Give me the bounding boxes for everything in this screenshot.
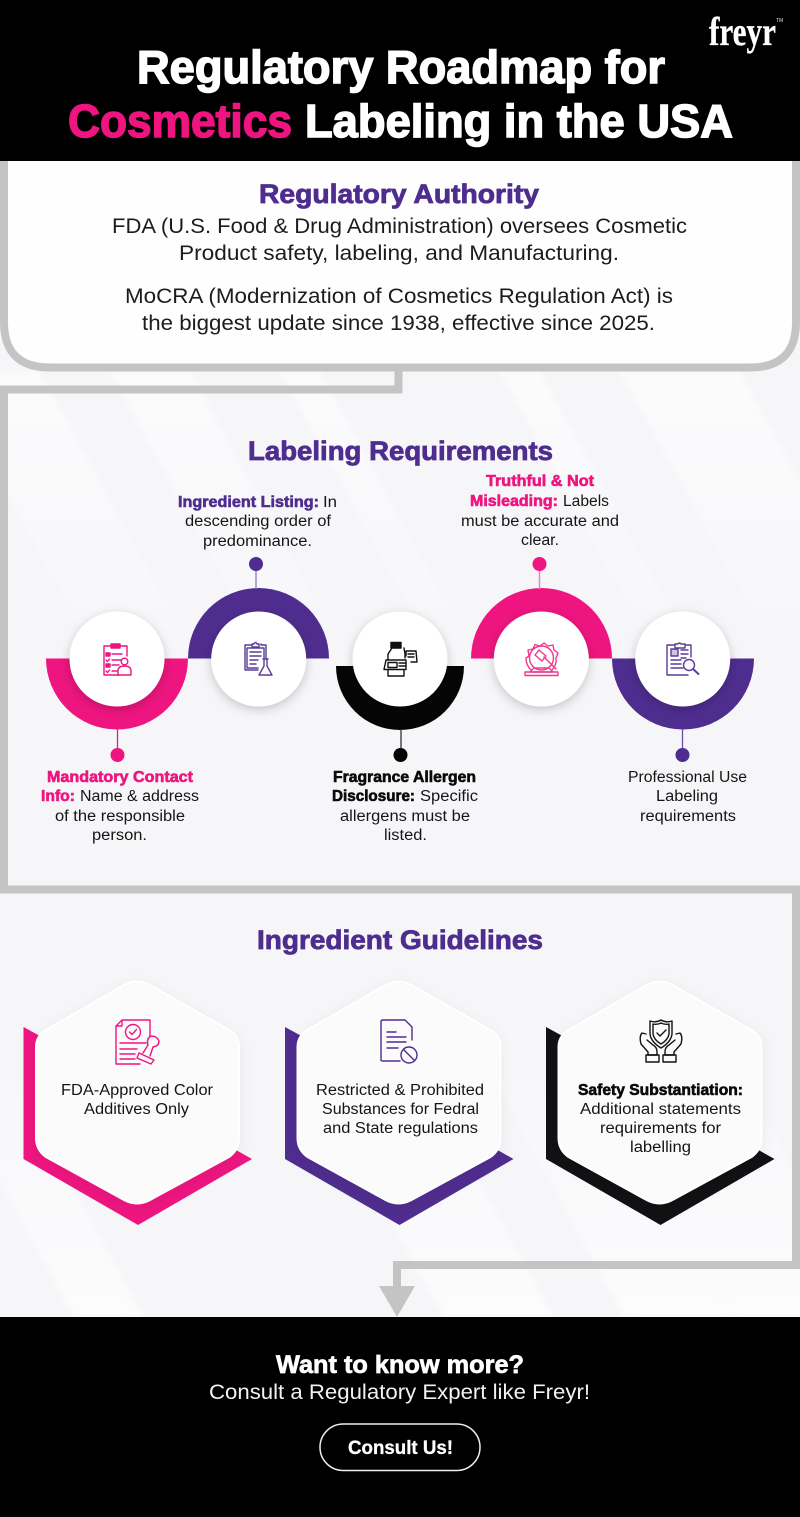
- card: color additives: [24, 982, 252, 1225]
- card: safety substantiation: [546, 982, 774, 1225]
- footer text: Consult a Regulatory Expert like Freyr!: [209, 1381, 590, 1404]
- text: safety substantiation: Additional statements: [580, 1101, 741, 1118]
- label: truthful and not misleading: [461, 473, 619, 549]
- text: safety substantiation: requirements for: [600, 1120, 721, 1137]
- text: MoCRA update: MoCRA (Modernization of Cosmetics Regulation Act) is: [125, 285, 673, 308]
- button: consult us: Consult Us!: [348, 1438, 453, 1459]
- text: restricted substances: Substances for Fedral: [322, 1101, 479, 1118]
- step 4: truthful and not misleading: [461, 473, 619, 706]
- logo: freyr: freyr: [709, 9, 776, 54]
- icon: hands holding shield: [640, 1020, 682, 1062]
- roadmap connector line: [4, 368, 796, 1317]
- title: [68, 41, 733, 147]
- text: restricted substances: [316, 1082, 484, 1137]
- label: truthful and not misleading: must be accurate and: [461, 513, 619, 530]
- text: FDA oversight: FDA (U.S. Food & Drug Administration) oversees Cosmetic: [112, 215, 687, 238]
- step 5: professional use labeling: [612, 612, 754, 825]
- title: Cosmetics: [68, 95, 292, 147]
- label: mandatory contact info: of the responsible: [55, 808, 185, 825]
- icon: gavel in gear: [525, 643, 558, 676]
- label: truthful and not misleading: Truthful & Not: [486, 473, 594, 490]
- heading: labeling requirements: Labeling Requirements: [248, 436, 553, 466]
- label: mandatory contact info: Info:: [41, 788, 75, 805]
- text: color additives: Additives Only: [84, 1101, 189, 1118]
- label: ingredient listing: predominance.: [203, 533, 312, 550]
- label: truthful and not misleading: Labels: [563, 493, 609, 510]
- text: FDA oversight: Product safety, labeling, and Manufacturing.: [179, 242, 619, 265]
- heading: regulatory authority: Regulatory Authority: [259, 179, 539, 209]
- label: fragrance allergen disclosure: Fragrance Allergen: [333, 769, 476, 786]
- step 2: ingredient listing: [178, 494, 337, 706]
- label: ingredient listing: In: [323, 494, 337, 511]
- label: mandatory contact info: person.: [92, 827, 147, 844]
- text: color additives: [61, 1082, 213, 1118]
- footer band: [0, 1317, 800, 1517]
- button: consult us: [320, 1424, 480, 1470]
- label: professional use labeling: [628, 769, 747, 825]
- label: mandatory contact info: [41, 769, 199, 844]
- label: fragrance allergen disclosure: allergens must be: [340, 808, 470, 825]
- logo: freyr: TM: [776, 18, 783, 24]
- label: ingredient listing: descending order of: [185, 513, 332, 530]
- icon: checklist with person: [104, 644, 131, 675]
- text: safety substantiation: Safety Substantiation:: [578, 1082, 743, 1099]
- text: safety substantiation: labelling: [630, 1139, 691, 1156]
- label: ingredient listing: [178, 494, 337, 550]
- text: MoCRA update: the biggest update since 1938, effective since 2025.: [142, 312, 655, 335]
- icon: bottle with labels: [384, 642, 417, 676]
- header band: [0, 0, 800, 161]
- icon: clipboard with flask: [245, 642, 272, 675]
- icon: clipboard with magnifier: [667, 643, 698, 675]
- card: restricted substances: [285, 982, 514, 1225]
- label: fragrance allergen disclosure: Specific: [420, 788, 478, 805]
- title: Labeling in the USA: [305, 95, 733, 147]
- label: truthful and not misleading: Misleading:: [470, 493, 558, 510]
- step 1: mandatory contact info: [41, 612, 199, 844]
- heading: ingredient guidelines: Ingredient Guidelines: [257, 925, 543, 955]
- text: FDA oversight: [112, 215, 687, 265]
- label: mandatory contact info: Name & address: [80, 788, 199, 805]
- label: fragrance allergen disclosure: listed.: [384, 827, 427, 844]
- text: restricted substances: and State regulations: [323, 1120, 478, 1137]
- label: professional use labeling: Labeling: [656, 788, 718, 805]
- label: mandatory contact info: Mandatory Contact: [47, 769, 193, 786]
- footer heading: Want to know more?: [276, 1351, 524, 1379]
- text: color additives: FDA-Approved Color: [61, 1082, 213, 1099]
- panel: regulatory authority: [4, 155, 796, 368]
- text: restricted substances: Restricted & Prohibited: [316, 1082, 484, 1099]
- label: ingredient listing: Ingredient Listing:: [178, 494, 319, 511]
- icon: certificate with stamp: [116, 1020, 159, 1064]
- label: professional use labeling: Professional Use: [628, 769, 747, 786]
- label: professional use labeling: requirements: [640, 808, 736, 825]
- icon: document with prohibited sign: [381, 1020, 417, 1063]
- label: fragrance allergen disclosure: Disclosure:: [332, 788, 415, 805]
- text: safety substantiation: [578, 1082, 743, 1156]
- text: MoCRA update: [125, 285, 673, 335]
- step 3: fragrance allergen disclosure: [332, 612, 478, 844]
- title: Regulatory Roadmap for: [137, 41, 665, 93]
- label: fragrance allergen disclosure: [332, 769, 478, 844]
- label: truthful and not misleading: clear.: [521, 532, 559, 549]
